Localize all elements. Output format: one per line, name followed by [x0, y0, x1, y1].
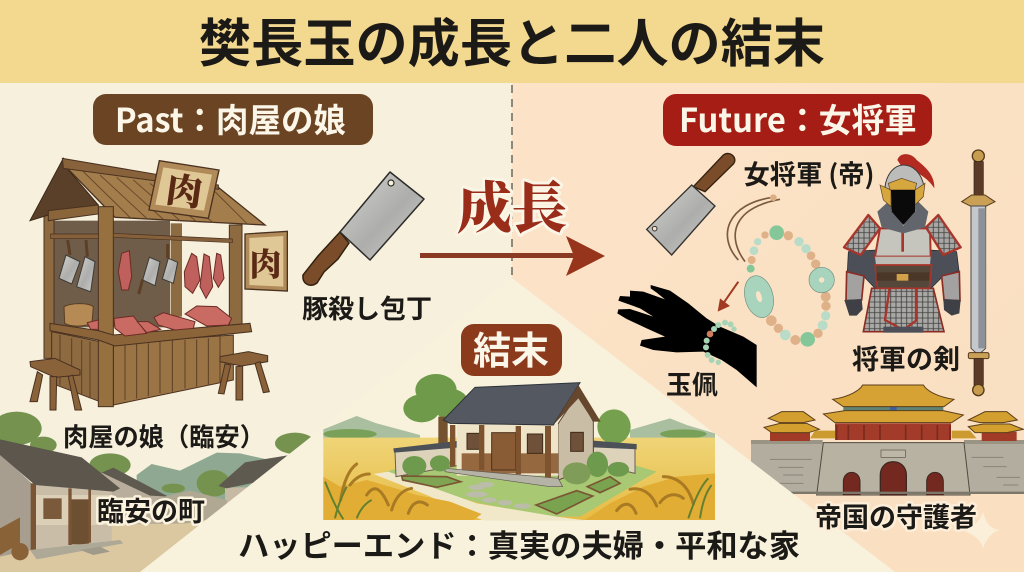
- collar: [877, 200, 928, 233]
- torso: [875, 228, 931, 257]
- sparkle: [962, 512, 1000, 548]
- label: imperial guardian: 帝国の守護者: [815, 496, 977, 535]
- divider: dashed past/future line: [511, 85, 513, 310]
- armor skirt: [863, 288, 944, 332]
- pauldrons: [844, 215, 880, 255]
- sleeves: [847, 250, 959, 290]
- foreground rice left: [323, 477, 482, 520]
- icon: jade pendant: [727, 194, 834, 347]
- background: future side: [512, 83, 1024, 572]
- heading badge: Past: Past：肉屋の娘: [115, 94, 346, 142]
- distant hills: [323, 416, 715, 440]
- background: past side: [0, 83, 512, 572]
- side shop sign: 肉: [249, 239, 281, 285]
- counter top: [50, 323, 252, 346]
- forearms: [846, 272, 960, 301]
- label: Lin'an town: 臨安の町: [97, 490, 205, 529]
- main shop sign: [149, 161, 219, 218]
- scene: imperial fortress: [751, 385, 1024, 495]
- label: butcher's daughter: 肉屋の娘（臨安）: [63, 417, 265, 454]
- lawn: [375, 453, 657, 517]
- scene: Lin'an town: [0, 412, 315, 572]
- stepping stones: [466, 482, 531, 509]
- rice field: [323, 438, 715, 520]
- caption: happy ending: ハッピーエンド：真実の夫婦・平和な家: [238, 521, 800, 566]
- shrubs: [402, 452, 629, 477]
- label: pig-slaughter knife: 豚殺し包丁: [302, 289, 432, 326]
- icon: small arrow to wrist: [718, 282, 738, 312]
- badge: ending: 結末: [473, 320, 549, 375]
- arrow: past to future: [420, 236, 605, 276]
- illustration: butcher stall: [30, 158, 287, 410]
- hanging cleavers: [59, 255, 178, 292]
- title band: 樊長玉の成長と二人の結末: [199, 2, 825, 77]
- house walls: [558, 393, 593, 480]
- label: jade pendant: 玉佩: [666, 365, 718, 402]
- icon: future cleaver: [647, 153, 735, 255]
- stall roof: [63, 159, 265, 225]
- garden beds: [402, 476, 461, 487]
- foreground rice right: [585, 473, 715, 520]
- heading badge: Future: Future：女将軍: [679, 94, 917, 142]
- label: woman general: 女将軍 (帝): [744, 153, 874, 192]
- hanging meat: [118, 251, 224, 298]
- helmet: [885, 165, 924, 192]
- grain stalks left: [341, 464, 427, 513]
- meat on counter: [87, 306, 232, 336]
- label: growth: 成長: [457, 165, 567, 245]
- illustration: general's armor: [844, 154, 961, 333]
- cream path: [373, 472, 587, 521]
- plume: [897, 154, 934, 188]
- illustration: general's sword: [962, 150, 995, 396]
- belt: [875, 265, 932, 288]
- center panel: ending background: [140, 278, 895, 572]
- right stool: [218, 352, 269, 400]
- left stool: [30, 358, 82, 410]
- mortar tub: [64, 304, 93, 326]
- grain stalks right: [617, 477, 693, 513]
- hanging rail: [51, 233, 232, 243]
- house roof: [443, 383, 580, 425]
- main shop sign: 肉: [163, 162, 206, 217]
- side shop sign: [245, 231, 287, 291]
- tree right: [597, 409, 631, 444]
- label: general's sword: 将軍の剣: [852, 338, 960, 377]
- porch: [445, 468, 563, 487]
- stall interior back wall: [53, 221, 170, 327]
- icon: pig-slaughter cleaver: [303, 172, 424, 285]
- icon: silhouette hand with bracelet: [617, 285, 757, 387]
- title band: [0, 0, 1024, 83]
- tree left: [403, 374, 469, 422]
- illustration: farmhouse in rice field: [323, 374, 715, 521]
- compound walls: [395, 443, 460, 477]
